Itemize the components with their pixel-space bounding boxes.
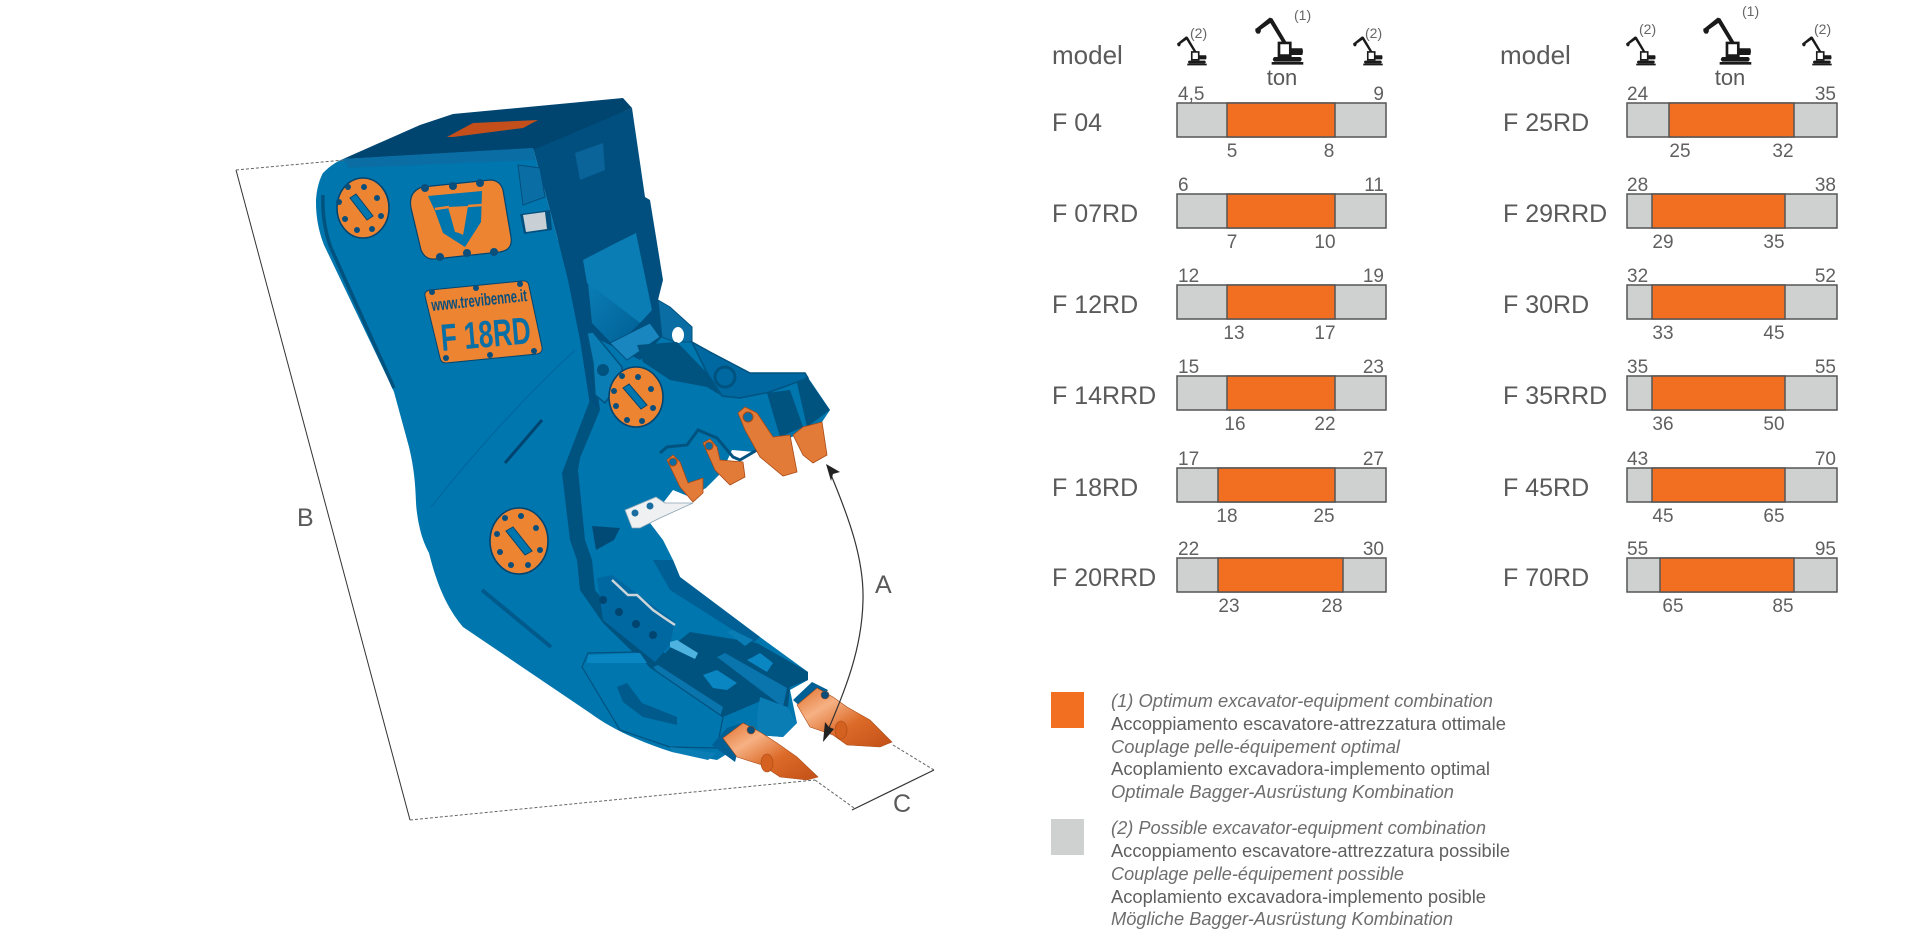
header column 2: (2): [1639, 21, 1656, 37]
label C: C: [893, 790, 911, 818]
header column 2: model: [1500, 40, 1571, 70]
row F 70RD: 85: [1772, 596, 1794, 617]
flange strip upper: [558, 233, 600, 410]
disc lower: [490, 508, 548, 574]
row F 29RRD: 28: [1627, 175, 1648, 196]
row F 20RRD: F 20RRD: [1052, 564, 1156, 592]
orange swatch: [1051, 692, 1084, 728]
row F 45RD: [1503, 449, 1837, 527]
row F 04: F 04: [1052, 109, 1102, 137]
lower jaw dark band: [653, 560, 760, 643]
row F 07RD: 6: [1178, 175, 1189, 196]
row F 18RD: 25: [1313, 506, 1335, 527]
row F 25RD: F 25RD: [1503, 109, 1589, 137]
side panel dark: [533, 108, 663, 365]
row F 25RD: 35: [1815, 84, 1836, 105]
header column 1: (1): [1294, 7, 1311, 23]
row F 18RD: F 18RD: [1052, 474, 1138, 502]
row F 35RRD: F 35RRD: [1503, 382, 1607, 410]
row F 07RD: 10: [1314, 232, 1336, 253]
possible text: [1111, 818, 1510, 929]
light triangle under side panel: [583, 233, 652, 323]
side bracket and plaques: [518, 165, 545, 205]
row F 35RRD: 35: [1627, 357, 1648, 378]
disc middle: [609, 367, 663, 427]
row F 20RRD: [1052, 539, 1386, 617]
row F 45RD: F 45RD: [1503, 474, 1589, 502]
possible text: (2) Possible excavator-equipment combination: [1111, 818, 1486, 838]
left flange edge: [323, 195, 394, 388]
row F 35RRD: 55: [1815, 357, 1836, 378]
bottom teeth: [723, 688, 892, 780]
row F 30RD: F 30RD: [1503, 291, 1589, 319]
row F 07RD: [1052, 175, 1386, 253]
row F 30RD: 33: [1652, 323, 1674, 344]
disc top left: [336, 178, 389, 238]
header column 2: ton: [1715, 65, 1745, 90]
grey swatch: [1051, 819, 1084, 855]
upper jaw teeth: [667, 407, 827, 502]
row F 18RD: 18: [1216, 506, 1238, 527]
dimension A arc with arrows: [823, 464, 863, 742]
flange strip lower: [562, 400, 688, 677]
row F 07RD: F 07RD: [1052, 200, 1138, 228]
row F 29RRD: F 29RRD: [1503, 200, 1607, 228]
row F 04: 4,5: [1178, 84, 1204, 105]
row F 04: [1052, 84, 1386, 162]
optimum text: (1) Optimum excavator-equipment combination: [1111, 691, 1493, 711]
table column 1: [1052, 7, 1386, 617]
label B: B: [297, 504, 314, 532]
row F 45RD: 70: [1815, 449, 1836, 470]
row F 20RRD: 28: [1321, 596, 1343, 617]
row F 30RD: [1503, 266, 1837, 344]
row F 29RRD: 38: [1815, 175, 1836, 196]
header column 1: model: [1052, 40, 1123, 70]
row F 07RD: 11: [1364, 175, 1384, 196]
row F 12RD: 12: [1178, 266, 1199, 287]
optimum text: Optimale Bagger-Ausrüstung Kombination: [1111, 782, 1454, 802]
optimum text: Acoplamiento excavadora-implemento optimal: [1111, 759, 1490, 779]
row F 29RRD: 35: [1763, 232, 1785, 253]
row F 18RD: 27: [1363, 449, 1384, 470]
row F 20RRD: 23: [1218, 596, 1240, 617]
row F 25RD: 25: [1669, 141, 1691, 162]
dimension B: [236, 170, 410, 820]
machine illustration: F 18RD demolition jaw: [236, 98, 934, 820]
dimension C: [852, 770, 934, 810]
header column 2: [1500, 3, 1832, 90]
top opening: [447, 120, 538, 137]
row F 14RRD: 15: [1178, 357, 1199, 378]
row F 70RD: 65: [1662, 596, 1684, 617]
row F 35RRD: [1503, 357, 1837, 435]
plate model: F 18RD: [439, 310, 532, 360]
row F 70RD: 55: [1627, 539, 1648, 560]
row F 18RD: [1052, 449, 1386, 527]
upper jaw dark blocks: [767, 390, 803, 437]
header column 2: (2): [1814, 21, 1831, 37]
row F 14RRD: 23: [1363, 357, 1384, 378]
row F 25RD: 24: [1627, 84, 1649, 105]
cylinder: [588, 283, 640, 347]
row F 20RRD: 30: [1363, 539, 1384, 560]
row F 25RD: 32: [1772, 141, 1794, 162]
row F 04: 5: [1227, 141, 1237, 162]
row F 70RD: F 70RD: [1503, 564, 1589, 592]
white bracket: [625, 497, 693, 528]
header column 2: (1): [1742, 3, 1759, 19]
row F 18RD: 17: [1178, 449, 1199, 470]
optimum text: Couplage pelle-équipement optimal: [1111, 737, 1401, 757]
row F 12RD: 19: [1363, 266, 1384, 287]
header column 1: ton: [1267, 65, 1297, 90]
row F 12RD: 17: [1314, 323, 1336, 344]
row F 30RD: 45: [1763, 323, 1785, 344]
row F 04: 8: [1324, 141, 1334, 162]
optimum text: Accoppiamento escavatore-attrezzatura ottimale: [1111, 714, 1506, 734]
jaw bracket outline: [660, 430, 757, 460]
possible text: Mögliche Bagger-Ausrüstung Kombination: [1111, 909, 1453, 929]
optimum text: [1111, 691, 1506, 802]
tooth details: [747, 691, 847, 772]
left pin lug: [587, 332, 623, 403]
row F 29RRD: [1503, 175, 1837, 253]
header column 1: (2): [1365, 25, 1382, 41]
row F 35RRD: 36: [1652, 414, 1674, 435]
body silhouette: [316, 148, 830, 760]
row F 45RD: 45: [1652, 506, 1674, 527]
row F 12RD: 13: [1223, 323, 1245, 344]
label A: A: [875, 571, 892, 599]
row F 14RRD: F 14RRD: [1052, 382, 1156, 410]
dimension guide lines: [236, 160, 934, 820]
row F 20RRD: 22: [1178, 539, 1199, 560]
row F 25RD: [1503, 84, 1837, 162]
lower jaw block: [653, 632, 808, 717]
row F 30RD: 32: [1627, 266, 1648, 287]
possible text: Acoplamiento excavadora-implemento posible: [1111, 887, 1486, 907]
header column 1: (2): [1190, 25, 1207, 41]
row F 29RRD: 29: [1652, 232, 1674, 253]
row F 07RD: 7: [1227, 232, 1237, 253]
name plate: [425, 281, 542, 363]
row F 70RD: 95: [1815, 539, 1836, 560]
row F 12RD: [1052, 266, 1386, 344]
row F 70RD: [1503, 539, 1837, 617]
lower jaw inner channel: [597, 575, 675, 662]
row F 04: 9: [1373, 84, 1384, 105]
row F 14RRD: 22: [1314, 414, 1336, 435]
possible text: Accoppiamento escavatore-attrezzatura possibile: [1111, 841, 1510, 861]
table column 2: [1500, 3, 1837, 617]
top face: [343, 98, 632, 159]
row F 14RRD: 16: [1224, 414, 1246, 435]
upper jaw link: [637, 342, 720, 395]
right lug: [658, 300, 692, 342]
header column 1: [1052, 7, 1383, 90]
row F 30RD: 52: [1815, 266, 1836, 287]
logo plate: [410, 179, 511, 261]
row F 14RRD: [1052, 357, 1386, 435]
row F 45RD: 43: [1627, 449, 1648, 470]
plate url: www.trevibenne.it: [430, 286, 528, 315]
row F 35RRD: 50: [1763, 414, 1785, 435]
possible text: Couplage pelle-équipement possible: [1111, 864, 1404, 884]
top rim: [343, 148, 536, 168]
row F 45RD: 65: [1763, 506, 1785, 527]
body contour and slots: [431, 350, 575, 507]
legend: possible: [1051, 818, 1510, 929]
legend: optimum: [1051, 691, 1506, 802]
lower jaw face panel: [582, 652, 723, 748]
row F 12RD: F 12RD: [1052, 291, 1138, 319]
